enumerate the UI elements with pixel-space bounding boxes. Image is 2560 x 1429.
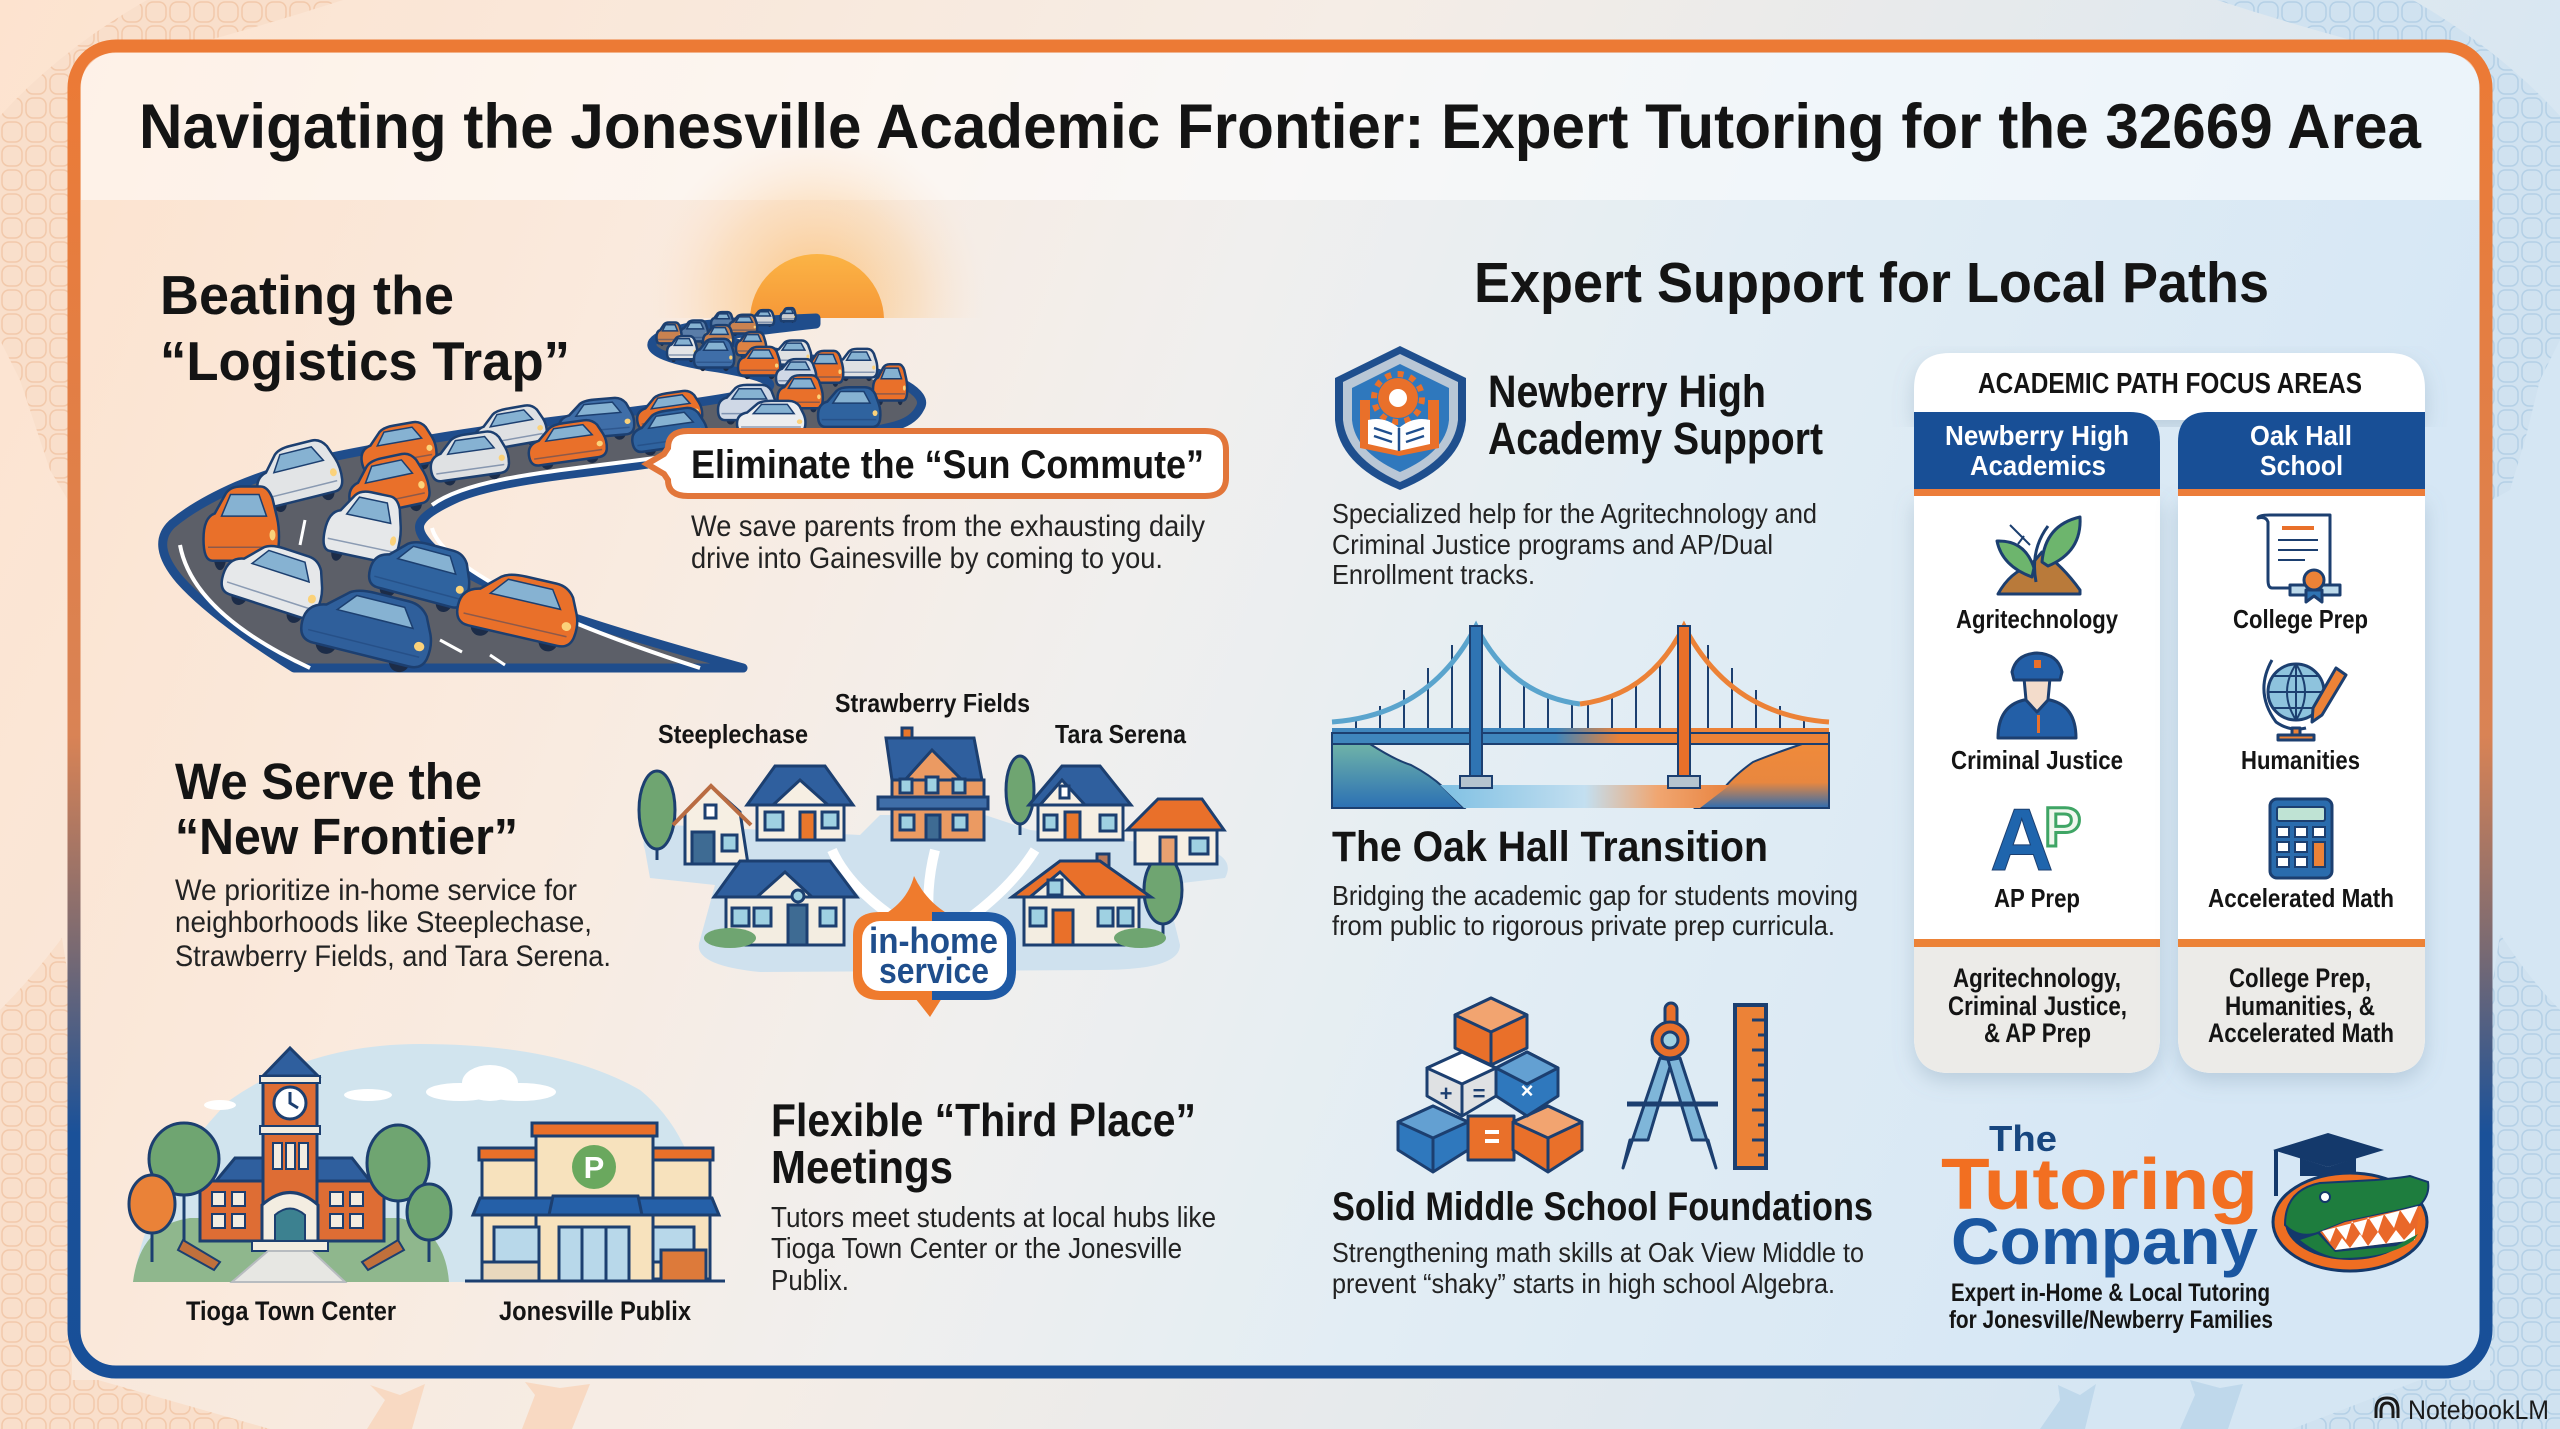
illustration: bridge	[1332, 626, 1829, 808]
text: sun commute description: drive into Gainesville by coming to you.	[691, 542, 1163, 575]
icon: AP letters	[1990, 790, 2081, 889]
decoration: blue alligator, right side	[2040, 0, 2560, 1429]
text: third place description: Publix.	[771, 1265, 849, 1297]
section: Solid Middle School Foundations	[1332, 998, 1873, 1299]
heading: Flexible Third Place Meetings	[771, 1094, 1196, 1193]
label: AP Prep: AP Prep	[1994, 883, 2080, 913]
heading: The Oak Hall Transition: The Oak Hall Transition	[1332, 823, 1768, 871]
shrubs	[704, 928, 1166, 948]
icon: police officer	[1998, 653, 2076, 738]
summary: Oak Hall focus: Accelerated Math	[2208, 1018, 2394, 1048]
house: lower left blue roof	[714, 861, 857, 945]
label: Agritechnology: Agritechnology	[1956, 604, 2118, 634]
house: far right orange roof	[1127, 799, 1224, 864]
text: Newberry description	[1332, 498, 1817, 590]
icon: globe and pencil	[2264, 660, 2346, 740]
text: neighbourhood description: We prioritize in-home service for	[175, 874, 577, 907]
illustration: road full of cars	[163, 308, 922, 678]
heading: We Serve the New Frontier	[175, 753, 518, 865]
illustration: neighbourhood houses	[639, 728, 1228, 972]
logo tagline	[1949, 1279, 2273, 1334]
labels: meeting places: Jonesville Publix	[499, 1296, 691, 1326]
text: Oak Hall description: Bridging the academic gap for students moving	[1332, 880, 1858, 911]
column: Newberry High Academics: Academics	[1970, 450, 2106, 481]
house: Strawberry Fields two storey	[878, 728, 988, 840]
logo: The Tutoring Company	[1941, 1118, 2428, 1334]
labels: neighbourhood names	[658, 688, 1186, 749]
text: neighbourhood description: Strawberry Fields, and Tara Serena.	[175, 940, 611, 973]
icon: plant	[1997, 517, 2080, 594]
label: Accelerated Math: Accelerated Math	[2208, 883, 2394, 913]
heading: We Serve the New Frontier: “New Frontier”	[175, 808, 518, 865]
house: far left	[673, 786, 751, 864]
logo wordmark: Tutoring	[1941, 1145, 2258, 1225]
icon: AP letters: A	[1990, 790, 2054, 889]
icon: math blocks: =	[1473, 1081, 1485, 1106]
section: Beating the Logistics Trap	[160, 130, 1226, 678]
labels: neighbourhood names: Strawberry Fields	[835, 688, 1030, 718]
icon: ruler	[1735, 1005, 1766, 1168]
illustration: Jonesville Publix: P	[584, 1150, 604, 1185]
callout: Eliminate the Sun Commute: Eliminate the “Sun Commute”	[691, 443, 1204, 487]
text: neighbourhood description	[175, 874, 611, 973]
heading: Flexible Third Place Meetings: Meetings	[771, 1141, 953, 1193]
labels: neighbourhood names: Tara Serena	[1055, 719, 1186, 749]
panel: academic path focus areas	[1914, 353, 2425, 1073]
heading: Flexible Third Place Meetings: Flexible “Third Place”	[771, 1094, 1196, 1146]
heading: Beating the Logistics Trap: “Logistics Trap”	[160, 330, 570, 392]
callout: Eliminate the Sun Commute	[647, 431, 1226, 496]
text: third place description: Tioga Town Center or the Jonesville	[771, 1233, 1182, 1265]
column: Oak Hall School: School	[2260, 450, 2343, 481]
heading: Beating the Logistics Trap	[160, 264, 570, 392]
text: middle school description: prevent “shaky” starts in high school Algebra.	[1332, 1268, 1835, 1299]
badge: in-home service	[853, 876, 1016, 1017]
icon: math blocks: +	[1440, 1081, 1452, 1106]
logo wordmark: Company	[1951, 1204, 2258, 1278]
heading: Newberry High Academy Support: Newberry High	[1488, 366, 1766, 417]
logo: gator with graduation cap	[2273, 1133, 2428, 1271]
house: Steeplechase blue roof	[747, 766, 853, 840]
labels: neighbourhood names: Steeplechase	[658, 719, 808, 749]
heading: Expert Support for Local Paths: Expert Support for Local Paths	[1474, 251, 2269, 315]
column: Oak Hall School	[2178, 412, 2425, 1073]
column: Oak Hall School: Oak Hall	[2250, 420, 2352, 451]
label: Criminal Justice: Criminal Justice	[1951, 745, 2123, 775]
section: We Serve the New Frontier	[175, 688, 1228, 1017]
label: Humanities: Humanities	[2241, 745, 2360, 775]
text: Newberry description: Specialized help for the Agritechnology and	[1332, 498, 1817, 529]
logo tagline: Expert in-Home & Local Tutoring	[1951, 1279, 2270, 1307]
heading: Solid Middle School Foundations: Solid Middle School Foundations	[1332, 1185, 1873, 1229]
logo wordmark	[1941, 1118, 2258, 1278]
section: Newberry High Academy Support	[1332, 346, 1823, 590]
icon: calculator	[2270, 799, 2332, 878]
summary: Oak Hall focus: College Prep,	[2229, 963, 2371, 993]
text: Newberry description: Criminal Justice programs and AP/Dual	[1332, 529, 1773, 560]
icon: diploma	[2258, 515, 2340, 602]
text: Oak Hall description: from public to rigorous private prep curricula.	[1332, 910, 1835, 941]
logo tagline: for Jonesville/Newberry Families	[1949, 1306, 2273, 1334]
text: third place description: Tutors meet students at local hubs like	[771, 1202, 1216, 1234]
heading: We Serve the New Frontier: We Serve the	[175, 753, 482, 810]
section: The Oak Hall Transition	[1332, 626, 1858, 941]
icon: rising sun	[679, 157, 956, 318]
text: Oak Hall description	[1332, 880, 1858, 941]
text: neighbourhood description: neighborhoods like Steeplechase,	[175, 906, 592, 939]
badge: in-home service: in-home	[869, 920, 998, 961]
watermark: NotebookLM: NotebookLM	[2408, 1395, 2549, 1425]
heading: Newberry High Academy Support: Academy Support	[1488, 413, 1823, 464]
text: Newberry description: Enrollment tracks.	[1332, 559, 1535, 590]
title: Navigating the Jonesville Academic Frontier: Expert Tutoring for the 32669 Area	[139, 92, 2422, 162]
illustration: Tioga Town Center	[129, 1044, 704, 1282]
heading: Beating the Logistics Trap: Beating the	[160, 264, 454, 326]
trees	[639, 756, 1182, 935]
label: College Prep: College Prep	[2233, 604, 2368, 634]
heading: academic path focus areas: ACADEMIC PATH FOCUS AREAS	[1978, 368, 2362, 400]
house: lower right orange roof	[1012, 854, 1151, 945]
summary: Newberry focus: & AP Prep	[1984, 1018, 2091, 1048]
text: middle school description	[1332, 1237, 1864, 1299]
heading: Newberry High Academy Support	[1488, 366, 1823, 464]
icon: shield with gear and book	[1335, 346, 1466, 490]
trees around town center	[129, 1123, 451, 1262]
labels: meeting places: Tioga Town Center	[186, 1296, 396, 1326]
section: Flexible Third Place Meetings	[129, 1044, 1216, 1326]
title band	[81, 53, 2479, 200]
column: Newberry High Academics: Newberry High	[1945, 420, 2129, 451]
icon: compass	[1623, 1003, 1718, 1168]
text: sun commute description	[691, 510, 1205, 575]
summary: Newberry focus	[1948, 963, 2127, 1048]
text: sun commute description: We save parents from the exhausting daily	[691, 510, 1205, 543]
logo wordmark: The	[1989, 1118, 2057, 1159]
summary: Newberry focus: Criminal Justice,	[1948, 991, 2127, 1021]
summary: Oak Hall focus	[2208, 963, 2394, 1048]
summary: Oak Hall focus: Humanities, &	[2225, 991, 2375, 1021]
cars, far to near	[204, 308, 907, 678]
card top	[1914, 353, 2425, 420]
icon: AP letters: P	[2044, 795, 2081, 858]
icon: math blocks: ×	[1521, 1078, 1533, 1103]
text: third place description	[771, 1202, 1216, 1297]
badge: in-home service: service	[879, 950, 989, 991]
house: Tara Serena blue roof	[1029, 766, 1131, 840]
decoration: peach alligator, left side	[0, 0, 590, 1429]
labels: meeting places	[186, 1296, 691, 1326]
text: middle school description: Strengthening math skills at Oak View Middle to	[1332, 1237, 1864, 1268]
summary: Newberry focus: Agritechnology,	[1953, 963, 2121, 993]
illustration: Jonesville Publix	[465, 1123, 725, 1281]
icon: math blocks	[1398, 998, 1582, 1172]
benches	[178, 1240, 404, 1270]
column: Newberry High Academics	[1914, 412, 2160, 1073]
